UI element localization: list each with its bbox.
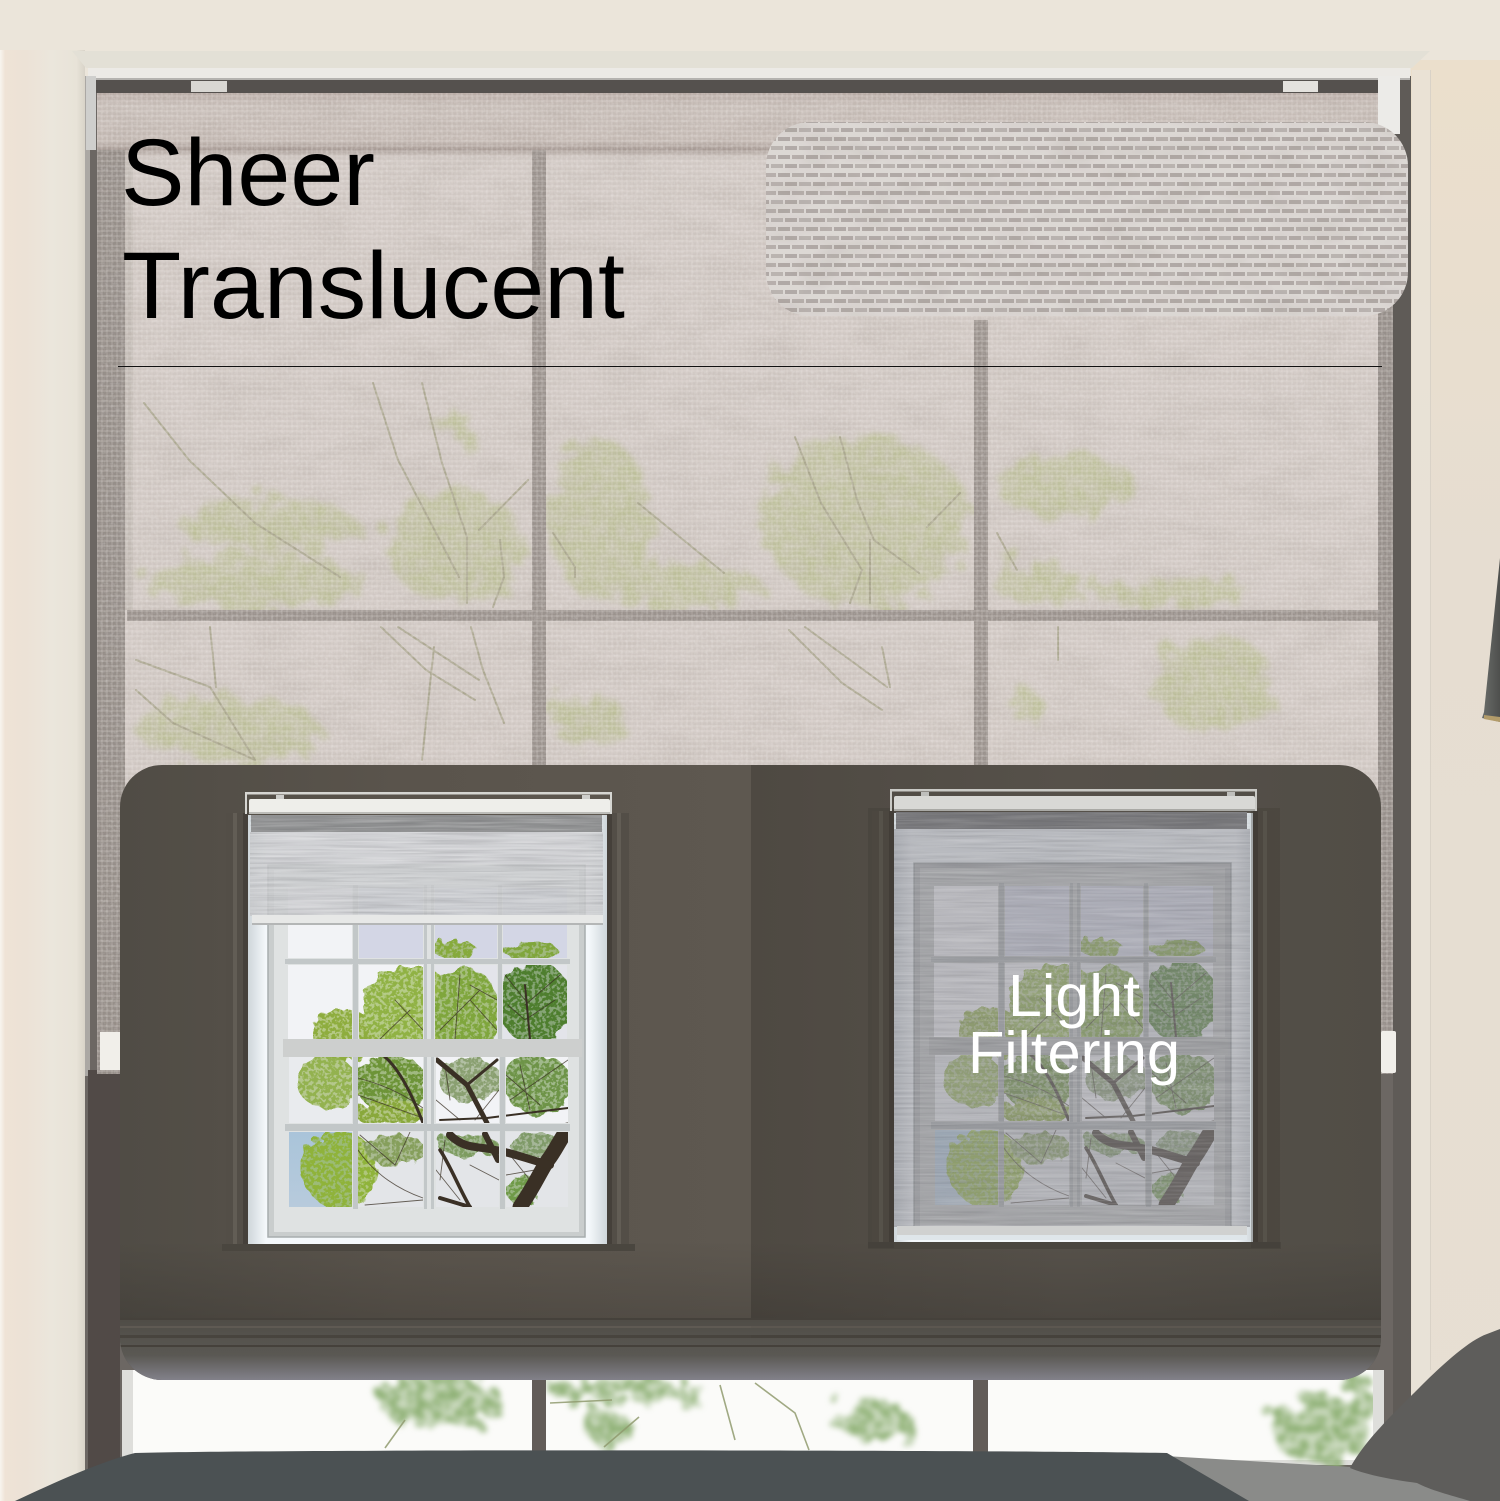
panel: before and after comparison [120,765,1381,1380]
headrail and mounting hardware [86,68,1410,150]
right window shade, lowered [894,812,1250,1240]
bed blanket [15,1450,1249,1501]
window trim top [72,51,1430,68]
panel half: shade raised [120,765,751,1380]
right headrail [890,789,1257,811]
pillow [1350,1329,1500,1501]
lamp [1482,558,1500,722]
fabric swatch [766,122,1408,316]
subtitle line: Translucent [122,233,625,339]
outdoor glass below shade [122,1370,1384,1465]
shade mullion shadows [127,150,1378,765]
roller shade fabric [97,92,1393,1074]
background tree foliage seen through shade [138,410,1275,762]
left window shade, raised [250,815,603,925]
title: Sheer [121,120,375,226]
left headrail [245,792,612,814]
panel half: shade lowered [751,765,1381,1380]
background tree branches [136,383,1058,760]
hem brackets [100,1031,1396,1073]
label: light filtering [968,963,1180,1086]
divider [118,366,1382,367]
label: light filtering: Filtering [968,1020,1180,1086]
label: light filtering: Light [1008,963,1140,1029]
bed sheet [1165,1456,1500,1501]
